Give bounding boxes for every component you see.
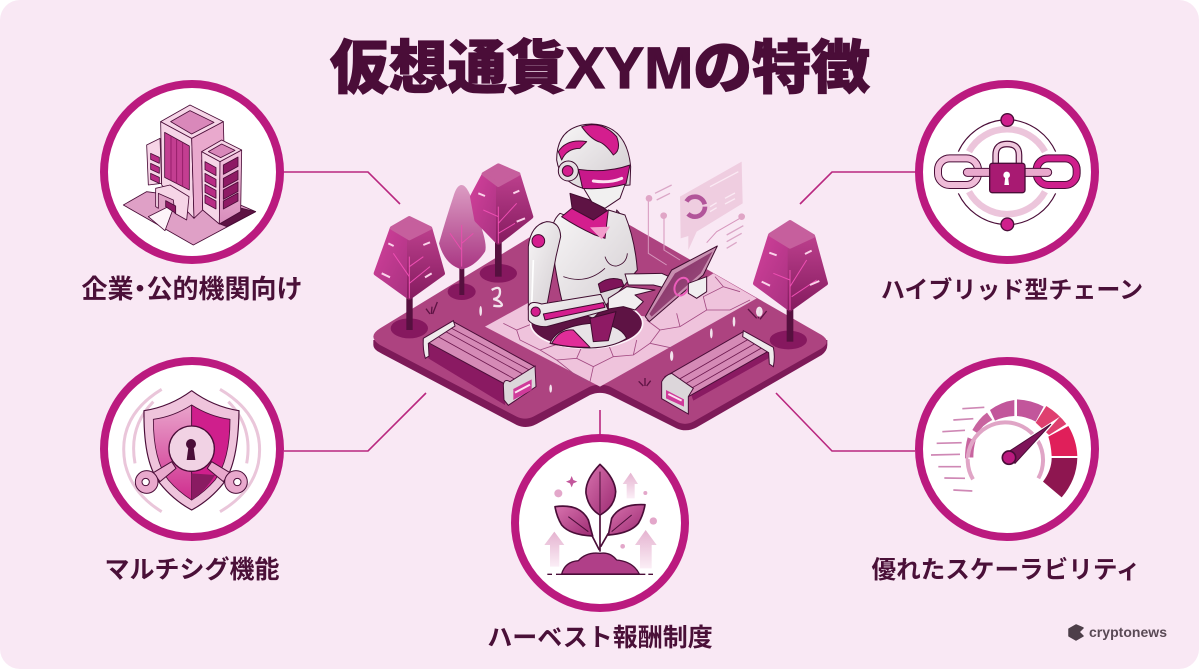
title: 仮想通貨XYMの特徴 xyxy=(330,36,870,101)
far arm xyxy=(625,273,677,290)
central illustration: robot in a park xyxy=(373,124,827,430)
shoulder and upper arm xyxy=(528,222,561,310)
connector lines xyxy=(284,172,915,451)
plot xyxy=(123,192,256,245)
tree left xyxy=(376,218,443,338)
visor xyxy=(578,165,630,189)
platform xyxy=(373,223,827,430)
inner scale xyxy=(968,422,1043,479)
holographic display xyxy=(646,162,745,265)
label: multisig: マルチシグ機能 xyxy=(104,555,280,584)
tablet xyxy=(645,246,717,322)
circle icon: hybrid chain lock xyxy=(919,84,1095,260)
paved path xyxy=(485,273,757,387)
forearm xyxy=(528,294,608,327)
shield xyxy=(144,391,239,510)
robot xyxy=(528,124,717,348)
entrance xyxy=(156,185,189,220)
padlock xyxy=(996,144,1019,167)
circle icon: speedometer xyxy=(919,361,1095,537)
grass tufts xyxy=(426,302,767,386)
right bench xyxy=(662,331,774,414)
chain links xyxy=(938,158,978,185)
tree right xyxy=(755,222,826,349)
orbit rings xyxy=(969,129,1045,214)
circle icon: harvest plant xyxy=(515,438,685,608)
sparkles xyxy=(554,476,657,549)
far hand xyxy=(688,277,707,298)
stems xyxy=(592,513,608,552)
label: scalability: 優れたスケーラビリティ xyxy=(871,556,1141,584)
left wing xyxy=(147,138,162,185)
logo: cryptonews: cryptonews xyxy=(1089,624,1167,640)
keys xyxy=(135,462,247,493)
cone tree xyxy=(439,185,486,300)
needle xyxy=(1005,417,1060,465)
gauge segments xyxy=(965,437,976,458)
label: enterprise: 企業・公的機関向け xyxy=(81,274,303,304)
glow particles xyxy=(479,288,763,393)
main tower xyxy=(161,122,194,218)
lower body xyxy=(550,323,627,348)
signal arcs xyxy=(124,389,260,512)
back shoulder xyxy=(617,210,628,260)
keyhole xyxy=(169,426,214,471)
helmet xyxy=(557,124,631,188)
hand xyxy=(608,287,655,310)
neck xyxy=(570,193,607,223)
left bench xyxy=(423,321,536,405)
right tower xyxy=(202,152,220,224)
speed lines xyxy=(931,407,984,491)
leaves xyxy=(555,464,645,536)
face xyxy=(582,180,627,208)
circle icon: enterprise building xyxy=(104,84,280,260)
arrows xyxy=(544,532,564,567)
torso xyxy=(551,210,637,318)
circle icon: multisig shield xyxy=(104,361,280,537)
tree back xyxy=(472,165,531,283)
label: harvest: ハーベスト報酬制度 xyxy=(487,624,713,652)
hole xyxy=(531,298,643,348)
label: hybrid chain: ハイブリッド型チェーン xyxy=(881,276,1143,304)
soil xyxy=(562,553,639,574)
